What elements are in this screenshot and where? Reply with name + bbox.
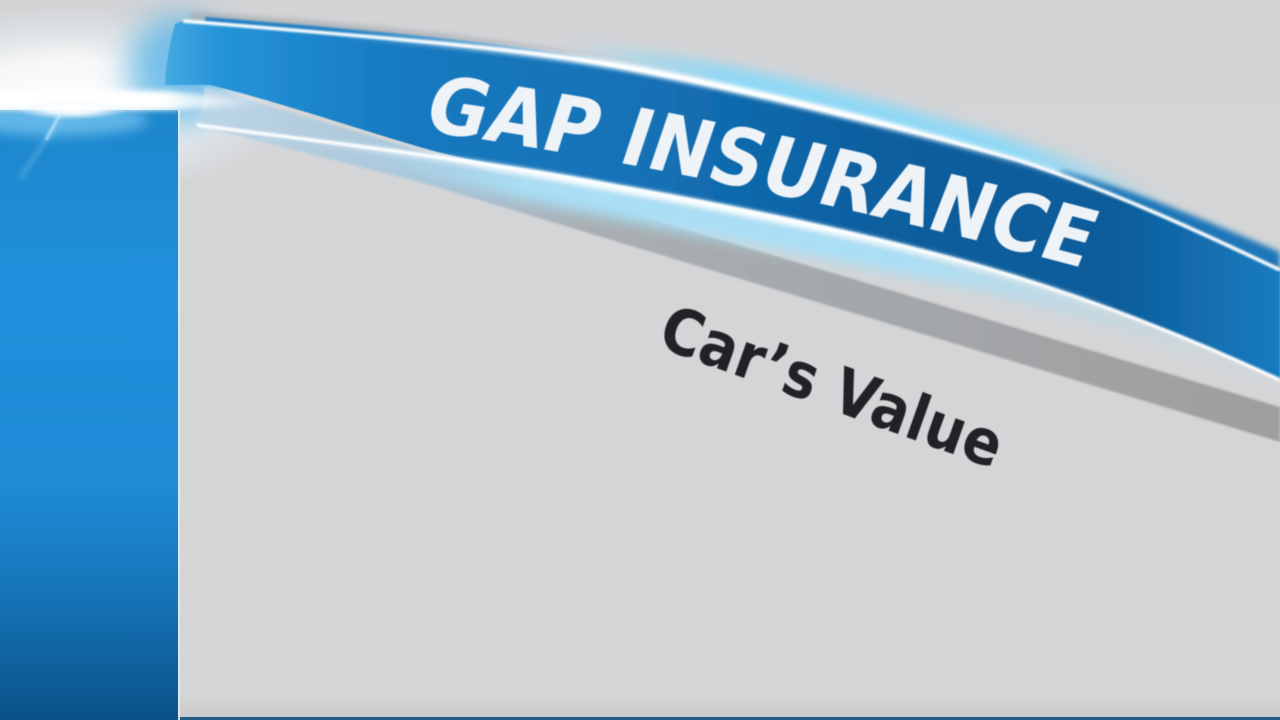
- blue banner ribbon: [165, 21, 1280, 380]
- panel: main content area: [180, 110, 1280, 717]
- icon: lens flare: [0, 89, 275, 178]
- background flare glow: [0, 6, 295, 198]
- panel: left blue sidebar: [0, 110, 180, 720]
- upper banner highlight: [183, 21, 1280, 270]
- bottom edge strip: [180, 717, 1280, 720]
- lower banner highlight: [197, 125, 1280, 380]
- banner drop shadow stripe: [200, 87, 1280, 442]
- upper banner glow: [190, 12, 1280, 272]
- lower banner glow: [330, 143, 1280, 388]
- text: Car's Value: Car’s Value: [651, 292, 1013, 484]
- title: GAP INSURANCE: GAP INSURANCE: [430, 76, 1100, 268]
